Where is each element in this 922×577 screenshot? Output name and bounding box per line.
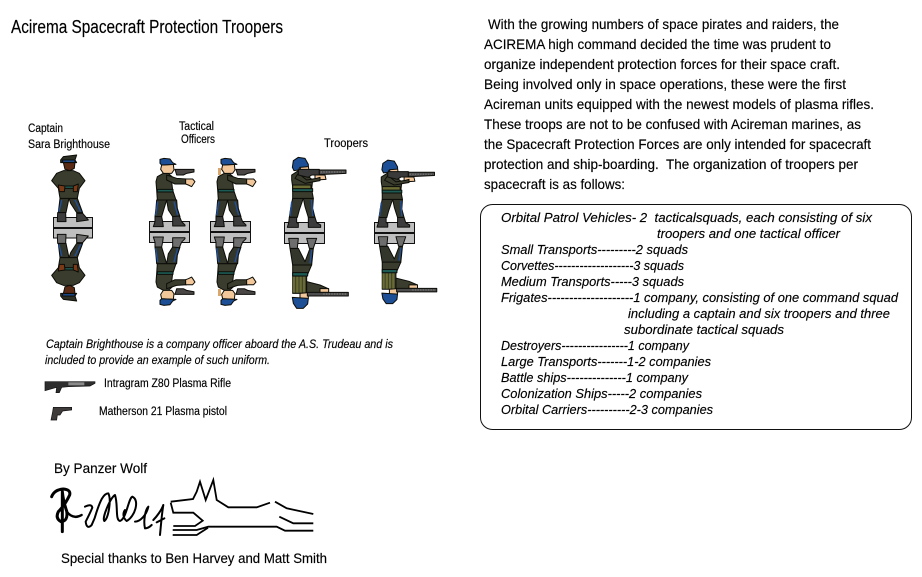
intro paragraph: Being involved only in space operations, these were the first [484,76,846,92]
author credit: By Panzer Wolf [54,460,147,476]
intro paragraph: Acireman units equipped with the newest models of plasma rifles. [484,96,874,112]
organization list: troopers and one tactical officer [657,226,841,241]
figure: captain and reflection [52,155,92,301]
intro paragraph: ACIREMA high command decided the time was prudent to [484,36,831,52]
organization list: Orbital Carriers----------2-3 companies [501,402,713,417]
intro paragraph: the Spacecraft Protection Forces are only intended for spacecraft [484,136,871,152]
label: plasma pistol: Matherson 21 Plasma pistol [99,406,227,418]
intro paragraph: These troops are not to be confused with Acireman marines, as [484,116,861,132]
label: captain: Sara Brighthouse [28,139,110,151]
organization list: subordinate tactical squads [624,322,784,337]
intro paragraph: organize independent protection forces for their space craft. [484,56,840,72]
intro paragraph: With the growing numbers of space pirates and raiders, the [488,16,839,32]
captain note [45,337,393,367]
intro paragraph: spacecraft is as follows: [484,176,625,192]
intro paragraph [484,16,874,192]
intro paragraph: protection and ship-boarding. The organization of troopers per [484,156,858,172]
captain note: Captain Brighthouse is a company officer aboard the A.S. Trudeau and is [46,337,393,351]
icon: plasma rifle [45,382,95,393]
organization list: Corvettes-------------------3 squads [501,258,684,273]
organization list: Orbital Patrol Vehicles- 2 tacticalsquads, each consisting of six [501,210,873,225]
organization list: including a captain and six troopers and three [628,306,890,321]
label: captain [28,123,110,151]
panel: trooper organization per spacecraft [480,204,912,430]
label: tactical officers [179,121,215,146]
wolf line drawing [171,480,313,535]
organization list: Battle ships--------------1 company [501,370,689,385]
icon: plasma pistol [51,407,72,420]
figure: tactical officer two and reflection [210,158,256,305]
figure: trooper two and reflection [374,160,437,304]
label: captain: Captain [28,123,63,135]
label: troopers: Troopers [324,138,368,150]
organization list: Colonization Ships-----2 companies [501,386,702,401]
title: Acirema Spacecraft Protection Troopers [11,17,283,37]
figure: tactical officer one and reflection [150,158,195,305]
organization list: Frigates--------------------1 company, consisting of one command squad [501,290,899,305]
figure: trooper one and reflection [284,157,348,308]
captain note: included to provide an example of such uniform. [45,353,270,367]
organization list: Destroyers----------------1 company [501,338,690,353]
organization list [501,210,899,417]
signature scribble [52,489,164,535]
label: tactical officers: Officers [181,134,215,146]
organization list: Large Transports-------1-2 companies [501,354,711,369]
label: plasma rifle: Intragram Z80 Plasma Rifle [104,378,231,390]
organization list: Small Transports---------2 squads [501,242,688,257]
thanks line: Special thanks to Ben Harvey and Matt Smith [61,550,327,566]
label: tactical officers: Tactical [179,121,214,133]
organization list: Medium Transports-----3 squads [501,274,684,289]
